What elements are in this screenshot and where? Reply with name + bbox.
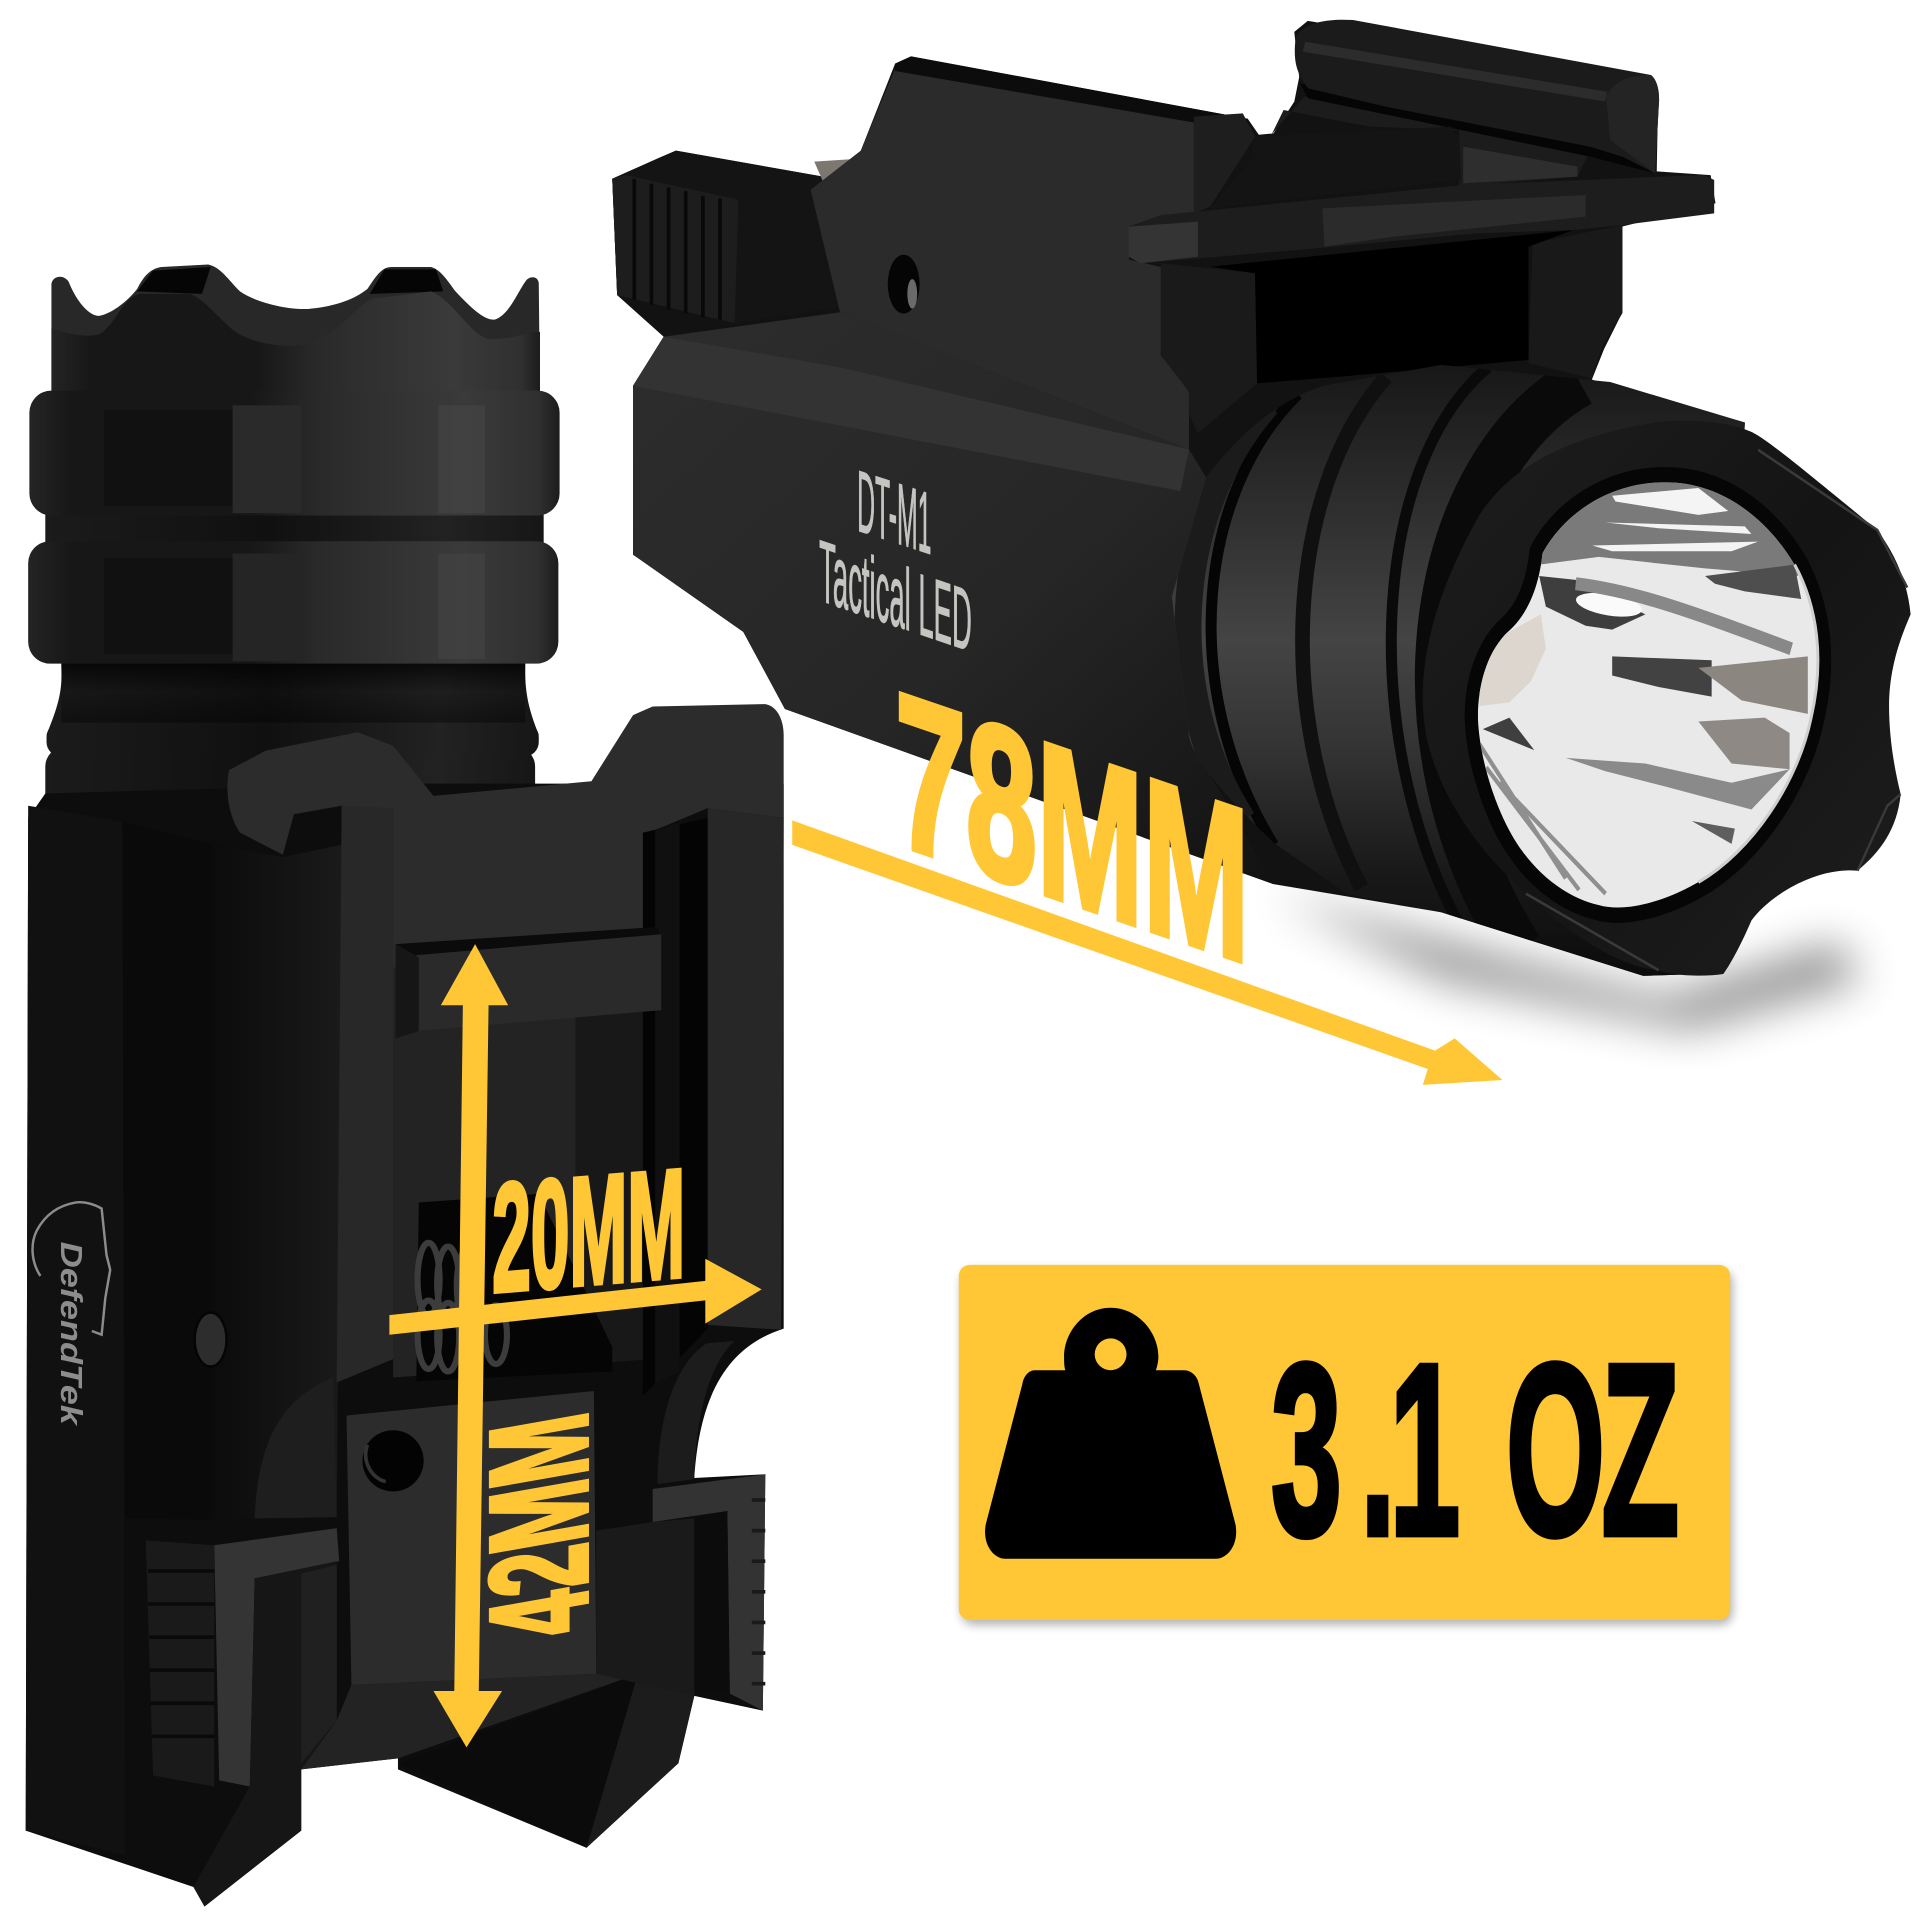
head: bezel and lens [1423,421,1911,976]
bezel ridge highlights [1526,450,1907,970]
clamp plate [1129,175,1714,263]
top mount plate [227,704,784,973]
right dark slot [643,818,708,1396]
rail highlight [1304,47,1606,97]
main housing side [633,312,1273,884]
reflector lens [1478,482,1816,908]
barrel [1172,365,1745,976]
lens rim highlight [1698,565,1818,882]
label: 42MM: 42MM [463,1404,617,1650]
neck [47,661,539,735]
serrated strip [1322,195,1586,247]
crown head [51,264,540,404]
label: 20MM: 20MM [492,1138,685,1325]
screw hole [888,255,920,313]
housing engraved model text: DT-M1 [857,452,931,573]
tower top edge [895,56,1253,137]
panel background [959,1265,1730,1620]
left rail [146,1528,339,1907]
left body facets [26,806,342,1855]
rear gray patch [1463,147,1577,183]
arrow: 20mm width [389,1259,762,1335]
panel shadow [961,1270,1733,1625]
tower end face [1194,113,1255,213]
front column [337,796,393,1382]
flashlight silhouette [612,21,1745,976]
left serrated lever [612,151,845,323]
logo: DefendTek [33,1202,110,1426]
lower plate with hole [347,1391,596,1685]
housing engraved model text [819,452,972,670]
grip ring upper [29,391,560,516]
scalloped bezel [1423,421,1911,976]
crossbar [1210,127,1461,208]
right column [708,808,784,1330]
tower end, crossbar and clamp plate [1129,113,1714,263]
right rail [596,1474,765,1711]
rail under-shelf [1271,97,1590,187]
right foot [398,1528,694,1848]
stop block [396,927,661,1038]
top rail and clamp [1161,20,1659,433]
body silhouette [26,784,784,1907]
logo: DefendTek: DefendTek [54,1242,88,1426]
icon: weight [985,1308,1236,1559]
window left side piece [1161,263,1257,433]
groove [45,512,544,546]
flashlight: front rail view [26,264,784,1907]
grip ring lower [28,541,558,664]
upper housing side plane [811,69,1194,449]
housing engraved model text: Tactical LED [819,521,972,670]
lower curved shoulders [255,1341,735,1518]
label: 78MM: 78MM [895,646,1249,1011]
arrow: 42mm height [433,944,508,1747]
spring window [416,1194,612,1381]
label: 3.1 OZ: 3.1 OZ [1271,1313,1679,1587]
arrow: 78mm length [792,820,1502,1085]
metal tab [814,158,872,184]
cast shadow of flashlight [1273,894,1861,1029]
inner black ring [1478,482,1818,908]
weight panel [959,1265,1733,1625]
window right side piece [1528,225,1622,378]
lower wedge [301,1674,638,1769]
rail end cap [1606,75,1659,173]
clamp window [1210,230,1573,383]
plate left end [1129,222,1198,263]
center channel panel [393,943,649,1378]
rail bar [1295,20,1659,173]
lower flare [45,722,539,820]
rail shadow band [1300,83,1655,173]
pin [195,1313,227,1367]
flashlight: angled front view [612,20,1911,1029]
